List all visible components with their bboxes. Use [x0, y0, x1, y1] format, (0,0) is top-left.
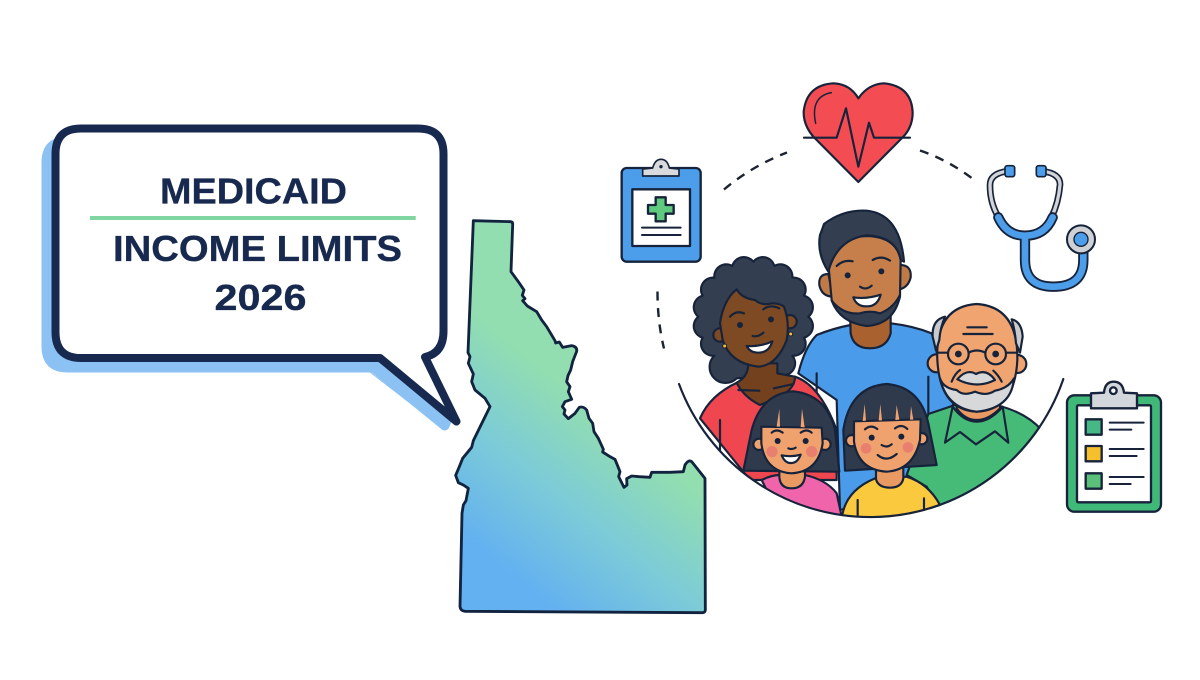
man beard: [832, 295, 900, 326]
grandfather: [907, 304, 1042, 510]
checklist item 2: [1086, 446, 1102, 461]
stethoscope blue tube: [998, 217, 1083, 287]
checklist paper: [1077, 405, 1151, 502]
family illustration: [679, 211, 1063, 520]
stethoscope chest piece: [1067, 225, 1095, 253]
grandfather collar: [945, 407, 1008, 444]
grandfather neck: [956, 404, 1002, 421]
checklist text lines: [1110, 423, 1144, 484]
girl right shirt: [842, 477, 940, 520]
girl right fringe slits: [863, 404, 913, 421]
man neck: [850, 313, 891, 348]
girl left features: [766, 430, 817, 463]
girl right ears: [846, 435, 857, 446]
icon: checklist clipboard: [1067, 382, 1161, 512]
man: [798, 211, 953, 510]
checklist board: [1067, 395, 1161, 512]
heartbeat line: [804, 108, 910, 167]
green divider: [90, 216, 416, 220]
grandfather eyes: [956, 352, 961, 356]
document lines: [642, 228, 681, 235]
girl left: [743, 391, 842, 517]
man face: [828, 236, 902, 312]
girl left hair: [743, 391, 839, 472]
woman hair back: [694, 257, 813, 383]
girl left fringe slits: [777, 409, 805, 427]
man ears: [819, 265, 911, 297]
stethoscope grey tubes outline: [990, 171, 1060, 217]
girl right hair: [843, 384, 937, 471]
heading: 2026: 2026: [214, 277, 306, 318]
grandfather side hair: [933, 317, 1023, 353]
dashed ring connector: top left: [724, 152, 787, 190]
girl right face: [854, 419, 921, 472]
round family crop: [694, 211, 1042, 520]
grandfather moustache: [957, 372, 995, 385]
woman top: [700, 377, 837, 480]
checklist item 3: [1086, 473, 1102, 489]
clipboard paper: [632, 189, 690, 246]
man hair: [819, 211, 904, 272]
woman: [694, 257, 837, 480]
stethoscope grey tubes: [990, 171, 1060, 217]
girl left face: [761, 427, 823, 473]
map of Idaho: [456, 221, 705, 613]
woman features: [720, 306, 793, 453]
girl right neck: [876, 467, 903, 488]
woman face: [720, 289, 788, 367]
girl left ears: [753, 439, 765, 450]
speech bubble callout: [42, 128, 456, 430]
dashed ring connector: top right: [920, 150, 973, 179]
stethoscope ear tips: [1005, 166, 1015, 177]
heart highlight: [814, 93, 831, 123]
bubble tail shadow: [370, 355, 452, 430]
man features: [817, 258, 928, 413]
green cross: [648, 197, 674, 221]
grandfather beard: [940, 378, 1014, 412]
grandfather shirt: [907, 405, 1042, 510]
man shirt: [798, 323, 953, 510]
heart shape: [804, 83, 913, 182]
clipboard board: [622, 168, 701, 262]
grandfather ears: [926, 353, 938, 374]
heading: Medicaid: MEDICAID: [160, 170, 347, 212]
bubble outline: [56, 128, 456, 422]
dashed ring connector: left: [658, 292, 664, 348]
grandfather glasses: [937, 327, 1017, 382]
stethoscope tube outline: [998, 217, 1083, 287]
girl left shirt: [762, 475, 842, 517]
checklist item 1: [1086, 419, 1102, 435]
clipboard clip: [643, 159, 679, 176]
icon: heart with heartbeat: [804, 83, 913, 182]
grandfather head: [937, 304, 1017, 412]
girl left neck: [778, 472, 806, 490]
bubble shadow: [42, 137, 445, 430]
heading: Income Limits: INCOME LIMITS: [113, 228, 402, 269]
checklist clip: [1091, 382, 1137, 408]
icon: stethoscope: [990, 166, 1095, 287]
girl right features: [861, 426, 913, 459]
woman neck and chest: [737, 363, 795, 405]
icon: medical clipboard: [622, 159, 701, 262]
girl right: [842, 384, 940, 520]
woman ears: [713, 328, 727, 342]
circle arc frame: [679, 379, 1063, 517]
